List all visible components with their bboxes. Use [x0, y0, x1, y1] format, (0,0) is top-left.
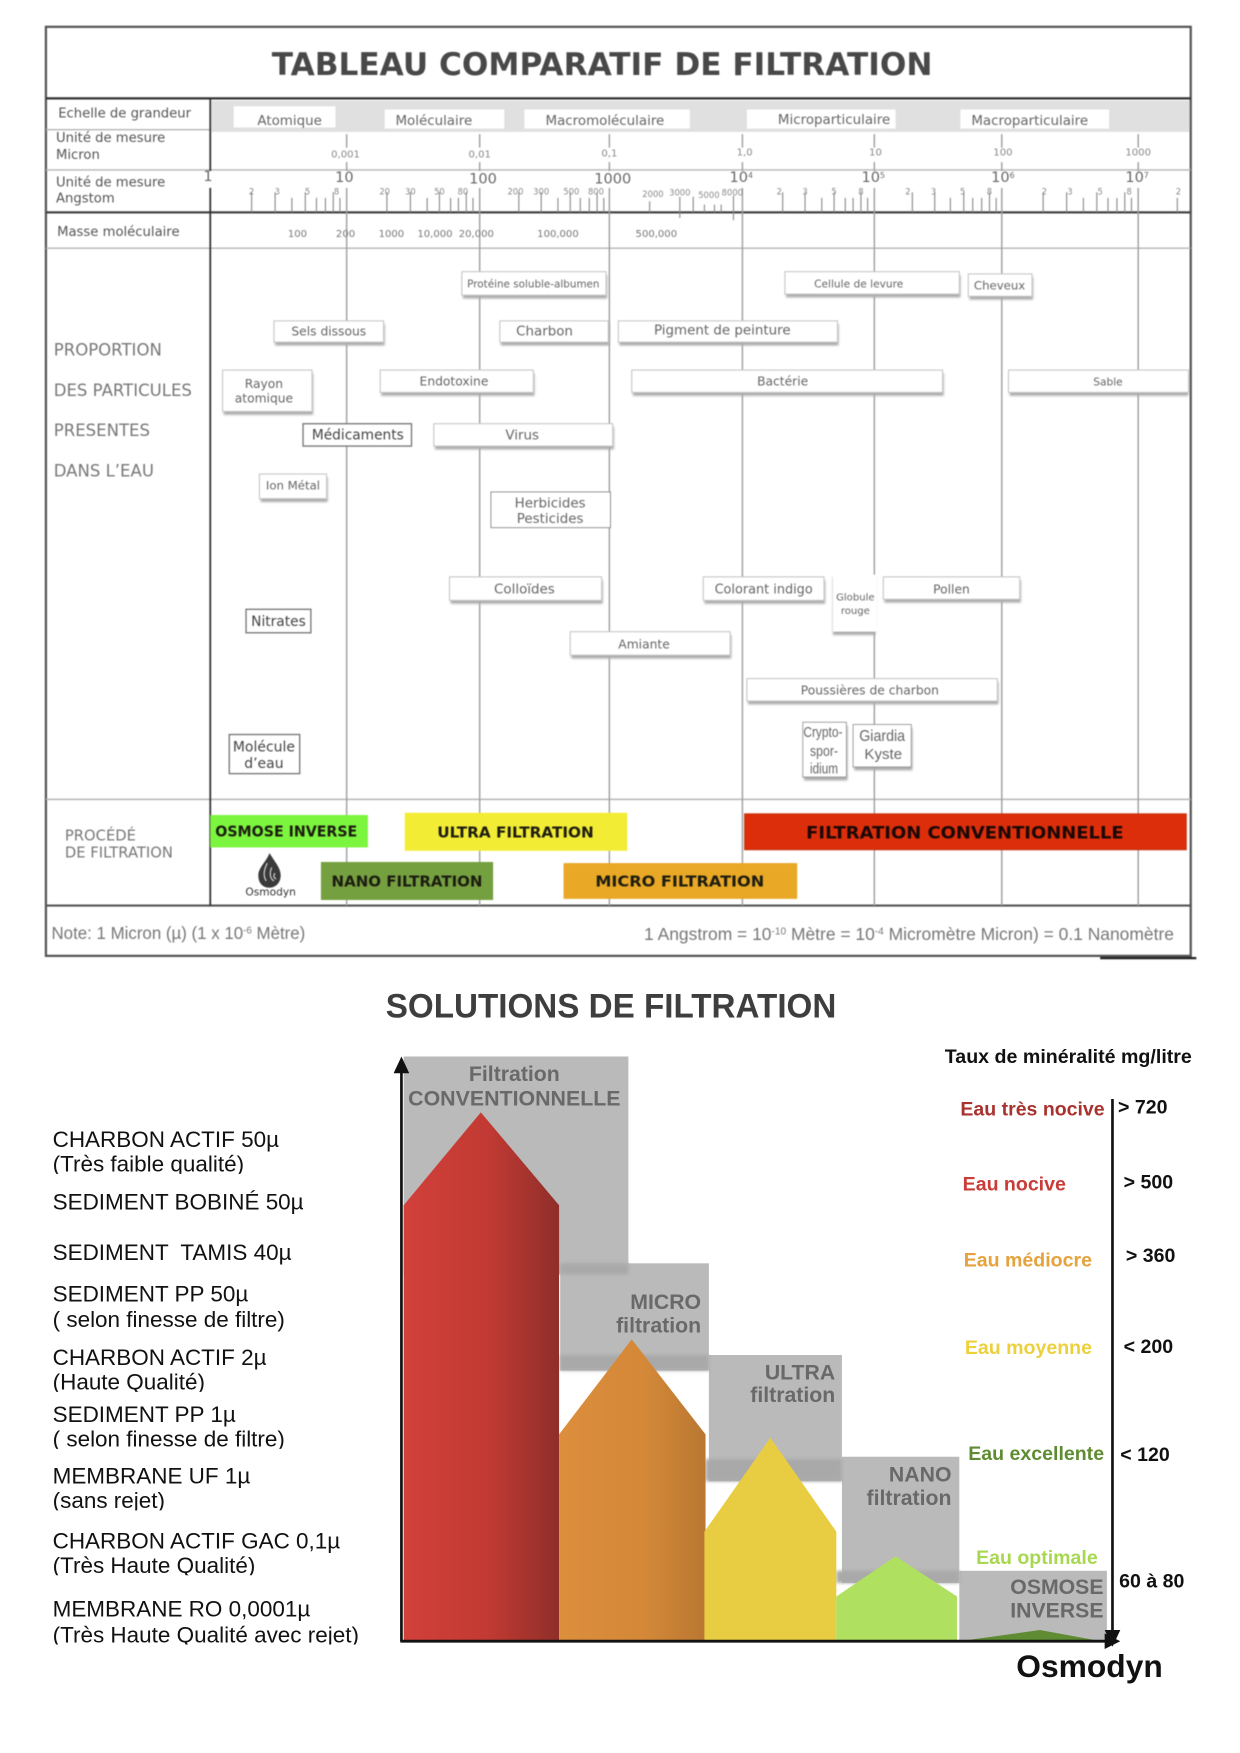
heading: procédé de filtration: [65, 828, 173, 861]
angstrom tick labels: 5: [305, 187, 310, 197]
particle: Sels dissous: Sels dissous: [291, 324, 366, 338]
list of filter media: (Haute Qualité): [53, 1370, 205, 1395]
micron scale: 0,1: [601, 149, 617, 160]
particle: Colloïdes: [450, 577, 603, 604]
molecular mass scale: [288, 229, 677, 240]
molecular mass scale: 20,000: [459, 229, 494, 240]
particle: Herbicides Pesticides: [491, 492, 610, 528]
list of filter media: SEDIMENT PP 1µ: [53, 1402, 236, 1427]
list of filter media: MEMBRANE UF 1µ: [53, 1464, 250, 1489]
heading: solutions de filtration: SOLUTIONS DE FILTRATION: [386, 987, 836, 1025]
angstrom tick labels: 300: [533, 187, 549, 197]
step label: osmose inverse: INVERSE: [1010, 1599, 1104, 1623]
particle: Poussières de charbon: Poussières de charbon: [801, 683, 939, 697]
process bar: filtration conventionnelle: FILTRATION CONVENTIONNELLE: [806, 822, 1124, 842]
angstrom tick labels: 200: [507, 187, 523, 197]
particle: Globule rouge: rouge: [841, 606, 870, 617]
list of filter media: CHARBON ACTIF 2µ: [53, 1345, 267, 1370]
heading: proportion des particules: PROPORTION: [54, 341, 162, 360]
angstrom tick labels: 5: [960, 187, 965, 197]
pentagon: nano (light green): [836, 1556, 957, 1641]
step label: micro filtration: filtration: [616, 1314, 701, 1338]
process bar: micro filtration: [564, 863, 797, 899]
molecular mass scale: 100,000: [537, 229, 579, 240]
step label: filtration conventionnelle: [408, 1062, 621, 1111]
heading: proportion des particules: DES PARTICULES: [54, 381, 192, 400]
particle: Nitrates: [246, 609, 311, 633]
note: angstrom definition: Micromètre Micron) = 0.1 Nanomètre: [884, 924, 1174, 944]
molecular mass scale: 1000: [379, 229, 404, 240]
particle: Colloïdes: Colloïdes: [494, 583, 555, 598]
angstrom tick labels: 3: [931, 187, 936, 197]
angstrom scale: 10: [991, 170, 1010, 186]
particle: Cellule de levure: [785, 272, 960, 297]
step label: nano filtration: NANO: [889, 1462, 951, 1486]
particle: Rayon atomique: atomique: [235, 391, 293, 405]
scale row: eau très nocive: Eau très nocive: [960, 1099, 1105, 1121]
angstrom tick labels: 8: [987, 187, 992, 197]
heading: proportion des particules: PRESENTES: [54, 421, 150, 440]
scale row: eau optimale: [976, 1547, 1185, 1593]
angstrom tick labels: 500: [563, 187, 579, 197]
particle: Sels dissous: [274, 321, 385, 345]
scale band: echelle de grandeur: Macroparticulaire: [971, 114, 1088, 129]
micron scale: 0,01: [469, 150, 491, 161]
heading: proportion des particules: [54, 341, 192, 480]
angstrom scale: 10: [730, 170, 748, 186]
angstrom tick labels: 800: [588, 187, 604, 197]
step label: micro filtration: [616, 1290, 701, 1338]
scale row: eau nocive: > 500: [1124, 1171, 1173, 1193]
pentagon: micro (orange): [559, 1339, 706, 1641]
particle: Poussières de charbon: [747, 679, 998, 704]
particle: Protéine soluble-albumen: [462, 272, 607, 299]
micron scale: 100: [993, 147, 1013, 158]
particle: Rayon atomique: [223, 370, 313, 415]
heading: procédé de filtration: DE FILTRATION: [65, 844, 173, 861]
process bar: osmose inverse: [210, 815, 368, 847]
note: micron definition: Note: 1 Micron (µ) (1 x 10: [52, 923, 248, 943]
angstrom tick labels: 5: [831, 187, 837, 197]
list of filter media: ( selon finesse de filtre): [53, 1427, 285, 1452]
particle: Médicaments: [303, 424, 411, 446]
angstrom tick labels: 5000: [698, 190, 720, 200]
micron scale: 0,001: [331, 150, 360, 161]
step label: ultra filtration: filtration: [750, 1383, 835, 1407]
logo: Osmodyn drop: [245, 853, 296, 899]
list of filter media: MEMBRANE RO 0,0001µ: [53, 1597, 310, 1622]
note: micron definition: -6: [243, 926, 252, 937]
angstrom tick labels: 8000: [722, 188, 743, 198]
arrow: vertical axis: [394, 1056, 409, 1641]
particle: Charbon: Charbon: [516, 324, 573, 339]
step label: osmose inverse: OSMOSE: [1010, 1575, 1104, 1599]
list of filter media: (Très Haute Qualité): [53, 1553, 255, 1578]
angstrom scale: 5: [880, 171, 885, 180]
angstrom tick labels: 8: [1127, 187, 1132, 197]
list of filter media: [50, 1127, 375, 1651]
process bar: nano filtration: [321, 862, 493, 900]
particle: Nitrates: Nitrates: [251, 614, 306, 630]
process bar: ultra filtration: ULTRA FILTRATION: [437, 823, 594, 841]
particle: Colorant indigo: [703, 577, 825, 604]
angstrom scale: 1000: [594, 171, 631, 187]
row labels: Angstom: [56, 191, 115, 206]
step label: micro filtration: MICRO: [630, 1290, 701, 1314]
angstrom tick labels: 2: [777, 187, 782, 197]
pentagon: conventional (red): [404, 1112, 559, 1641]
particle: Globule rouge: Globule: [836, 592, 875, 603]
molecular mass scale: 200: [336, 229, 355, 240]
scale row: eau excellente: [968, 1443, 1170, 1466]
list of filter media: (sans rejet): [53, 1488, 165, 1513]
note: angstrom definition: -4: [875, 927, 884, 938]
particle: Colorant indigo: Colorant indigo: [715, 583, 813, 598]
particle: Bactérie: Bactérie: [757, 375, 808, 389]
particle: Endotoxine: Endotoxine: [420, 375, 488, 389]
list of filter media: (Très Haute Qualité avec rejet): [53, 1622, 359, 1647]
step label: osmose inverse: [1010, 1575, 1104, 1623]
angstrom tick labels: 2: [1042, 187, 1047, 197]
angstrom tick labels: 3: [1067, 187, 1073, 197]
angstrom scale: [203, 169, 1149, 187]
particle: Ion Métal: Ion Métal: [266, 479, 320, 493]
particle: Protéine soluble-albumen: Protéine soluble-albumen: [467, 278, 600, 290]
angstrom tick labels: 2000: [642, 189, 664, 199]
scale row: eau excellente: Eau excellente: [968, 1443, 1104, 1465]
molecular mass scale: 500,000: [636, 229, 677, 240]
particle: Molécule d'eau: [229, 735, 300, 774]
panel: comparative filtration table: [46, 27, 1196, 958]
scale row: eau optimale: 60 à 80: [1119, 1571, 1185, 1593]
particle: Virus: [434, 424, 614, 449]
molecular mass scale: 100: [288, 229, 307, 240]
angstrom scale: 10: [861, 170, 880, 186]
angstrom scale: 100: [469, 171, 497, 187]
list of filter media: (Très faible qualité): [53, 1152, 244, 1177]
step label: filtration conventionnelle: Filtration: [469, 1062, 560, 1086]
particle: Bactérie: [632, 370, 944, 396]
particle: Globule rouge: [833, 575, 877, 635]
row labels: [56, 106, 192, 240]
angstrom tick labels: 80: [458, 187, 468, 197]
angstrom scale: 1: [203, 169, 213, 185]
table frame: [46, 27, 1196, 958]
scale band: echelle de grandeur: [211, 101, 1190, 132]
scale row: eau très nocive: > 720: [1118, 1097, 1168, 1119]
angstrom tick labels: 30: [405, 187, 416, 197]
row labels: Masse moléculaire: [57, 224, 180, 240]
list of filter media: SEDIMENT PP 50µ: [53, 1281, 248, 1306]
process bar: filtration conventionnelle: [745, 814, 1186, 850]
particle: Pigment de peinture: Pigment de peinture: [654, 323, 791, 338]
vertical scale lines: [347, 134, 1138, 906]
particle: Giardia Kyste: [853, 724, 912, 770]
list of filter media: CHARBON ACTIF GAC 0,1µ: [53, 1528, 340, 1553]
particle: Herbicides Pesticides: Herbicides: [515, 497, 586, 512]
particle: Molécule d'eau: d’eau: [244, 756, 284, 772]
heading: taux de minéralité: Taux de minéralité mg/litre: [945, 1047, 1192, 1068]
row labels: Micron: [56, 148, 100, 163]
particle: Cryptosporidium: idium: [810, 762, 838, 778]
particle: Rayon atomique: Rayon: [245, 377, 283, 391]
particle: Sable: Sable: [1093, 376, 1123, 389]
angstrom tick labels: [249, 187, 1181, 200]
micron scale: 10: [869, 147, 882, 158]
scale row: eau très nocive: [960, 1097, 1168, 1121]
particle: Pollen: [883, 577, 1021, 603]
angstrom tick labels: 50: [434, 187, 445, 197]
angstrom scale: 10: [335, 170, 354, 186]
title: TABLEAU COMPARATIF DE FILTRATION: [272, 47, 932, 83]
particle: Cheveux: Cheveux: [974, 279, 1025, 293]
step label: nano filtration: [867, 1462, 951, 1510]
particle: Amiante: [570, 632, 731, 658]
particle: Cheveux: [968, 274, 1033, 300]
note: angstrom definition: -10: [771, 927, 787, 938]
scale row: eau moyenne: < 200: [1124, 1336, 1173, 1358]
process bar: nano filtration: NANO FILTRATION: [332, 873, 482, 891]
particle: Amiante: Amiante: [618, 637, 670, 651]
list of filter media: ( selon finesse de filtre): [53, 1307, 285, 1332]
note: angstrom definition: Mètre = 10: [786, 924, 875, 944]
step label: ultra filtration: [750, 1361, 835, 1407]
process bar: ultra filtration: [405, 813, 627, 851]
heading: proportion des particules: DANS L’EAU: [54, 461, 154, 480]
scale row: eau médiocre: Eau médiocre: [964, 1250, 1092, 1272]
micron scale: [331, 147, 1151, 161]
heading: procédé de filtration: PROCÉDÉ: [65, 828, 136, 845]
row labels: Unité de mesure: [56, 175, 165, 191]
process bar: micro filtration: MICRO FILTRATION: [595, 873, 764, 891]
angstrom tick labels: 8: [334, 187, 339, 197]
particle: Charbon: [500, 321, 609, 345]
step label: filtration conventionnelle: CONVENTIONNELLE: [408, 1087, 621, 1111]
pentagon: osmosis (dark green): [959, 1630, 1101, 1641]
angstrom ticks: [252, 192, 1177, 220]
scale row: eau optimale: Eau optimale: [976, 1547, 1098, 1569]
particle: Cryptosporidium: spor-: [810, 744, 838, 760]
particle: Pollen: Pollen: [933, 583, 970, 597]
particle: Médicaments: Médicaments: [312, 427, 404, 443]
micron scale: 1000: [1125, 147, 1151, 158]
particle: Endotoxine: [380, 370, 534, 396]
scale row: eau médiocre: > 360: [1126, 1245, 1175, 1267]
angstrom tick labels: 2: [1176, 187, 1181, 197]
angstrom tick labels: 5: [1098, 187, 1103, 197]
scale band: echelle de grandeur: Microparticulaire: [778, 113, 890, 128]
angstrom tick labels: 3: [802, 187, 808, 197]
particle: Ion Métal: [259, 474, 328, 502]
scale band: echelle de grandeur: Moléculaire: [395, 113, 472, 129]
step label: ultra filtration: ULTRA: [765, 1361, 835, 1385]
particle: Cellule de levure: Cellule de levure: [814, 277, 903, 290]
list of filter media: SEDIMENT TAMIS 40µ: [53, 1240, 292, 1265]
brand: Osmodyn: Osmodyn: [1016, 1649, 1163, 1684]
particle: Giardia Kyste: Giardia: [859, 728, 905, 745]
note: micron definition: Mètre): [252, 923, 305, 943]
scale row: eau moyenne: Eau moyenne: [965, 1337, 1092, 1359]
particle: Giardia Kyste: Kyste: [864, 746, 902, 763]
list of filter media: CHARBON ACTIF 50µ: [53, 1127, 279, 1152]
chart: filtration steps: [394, 1056, 1120, 1649]
scale row: eau nocive: Eau nocive: [963, 1174, 1066, 1196]
particle: Molécule d'eau: Molécule: [233, 739, 295, 755]
particle: Virus: Virus: [505, 428, 539, 443]
angstrom tick labels: 2: [249, 187, 254, 197]
particle: Herbicides Pesticides: Pesticides: [517, 512, 583, 527]
process bar: osmose inverse: OSMOSE INVERSE: [215, 822, 357, 840]
particle: Cryptosporidium: [803, 722, 848, 780]
particle: Pigment de peinture: [618, 321, 839, 345]
scale row: eau moyenne: [965, 1336, 1173, 1359]
scale band: echelle de grandeur: Macromoléculaire: [546, 113, 664, 129]
grey background steps: [404, 1056, 1107, 1641]
angstrom tick labels: 20: [379, 187, 390, 197]
scale band: echelle de grandeur: Atomique: [257, 114, 322, 129]
angstrom tick labels: 8: [858, 187, 864, 197]
molecular mass scale: 10,000: [417, 229, 453, 240]
particle: Sable: [1008, 370, 1188, 396]
scale row: eau médiocre: [964, 1245, 1175, 1272]
angstrom tick labels: 2: [905, 187, 911, 197]
micron scale: 1,0: [737, 147, 753, 158]
pentagon: ultra (yellow): [704, 1438, 836, 1641]
row labels: Echelle de grandeur: [58, 106, 192, 121]
angstrom scale: 4: [748, 171, 753, 180]
particle: Cryptosporidium: Crypto-: [803, 725, 843, 741]
angstrom scale: 7: [1144, 171, 1149, 180]
angstrom scale: 6: [1010, 171, 1015, 180]
angstrom scale: 10: [1125, 170, 1144, 186]
note: angstrom definition: 1 Angstrom = 10: [644, 924, 771, 944]
logo: Osmodyn drop: Osmodyn: [245, 886, 296, 899]
scale row: eau nocive: [963, 1171, 1173, 1196]
angstrom tick labels: 3: [275, 187, 280, 197]
angstrom tick labels: 3000: [669, 188, 690, 198]
row labels: Unité de mesure: [56, 130, 165, 146]
step label: nano filtration: filtration: [867, 1486, 951, 1510]
list of filter media: SEDIMENT BOBINÉ 50µ: [53, 1190, 304, 1215]
arrow: horizontal axis: [400, 1633, 1120, 1649]
scale row: eau excellente: < 120: [1120, 1444, 1170, 1466]
arrow: mineral rate axis: [1105, 1099, 1120, 1647]
